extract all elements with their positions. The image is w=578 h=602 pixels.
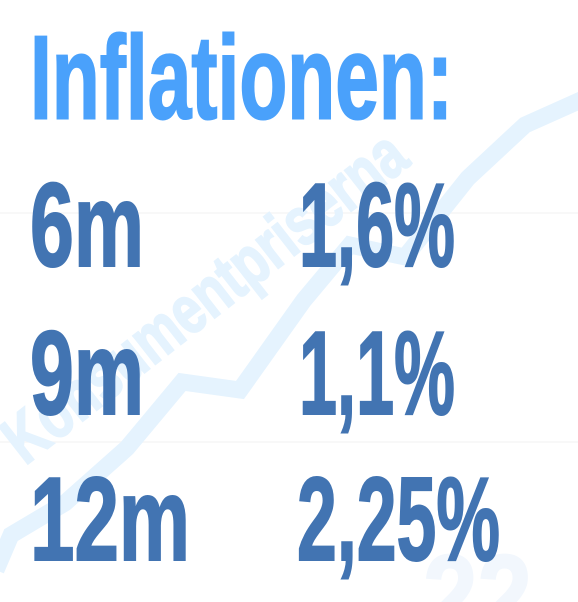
- watermark: Konsumentpriserna: Konsumentpriserna: [0, 115, 422, 478]
- row: 9 months: [30, 307, 455, 440]
- label 6m: 6m: [30, 159, 144, 292]
- watermark: line chart: [0, 96, 578, 570]
- row: 6 months: [30, 159, 455, 292]
- row: 12 months: [30, 453, 500, 586]
- label 9m: 9m: [30, 307, 144, 440]
- value 1,6%: 1,6%: [299, 159, 455, 292]
- label 12m: 12m: [30, 453, 190, 586]
- value 1,1%: 1,1%: [299, 307, 455, 440]
